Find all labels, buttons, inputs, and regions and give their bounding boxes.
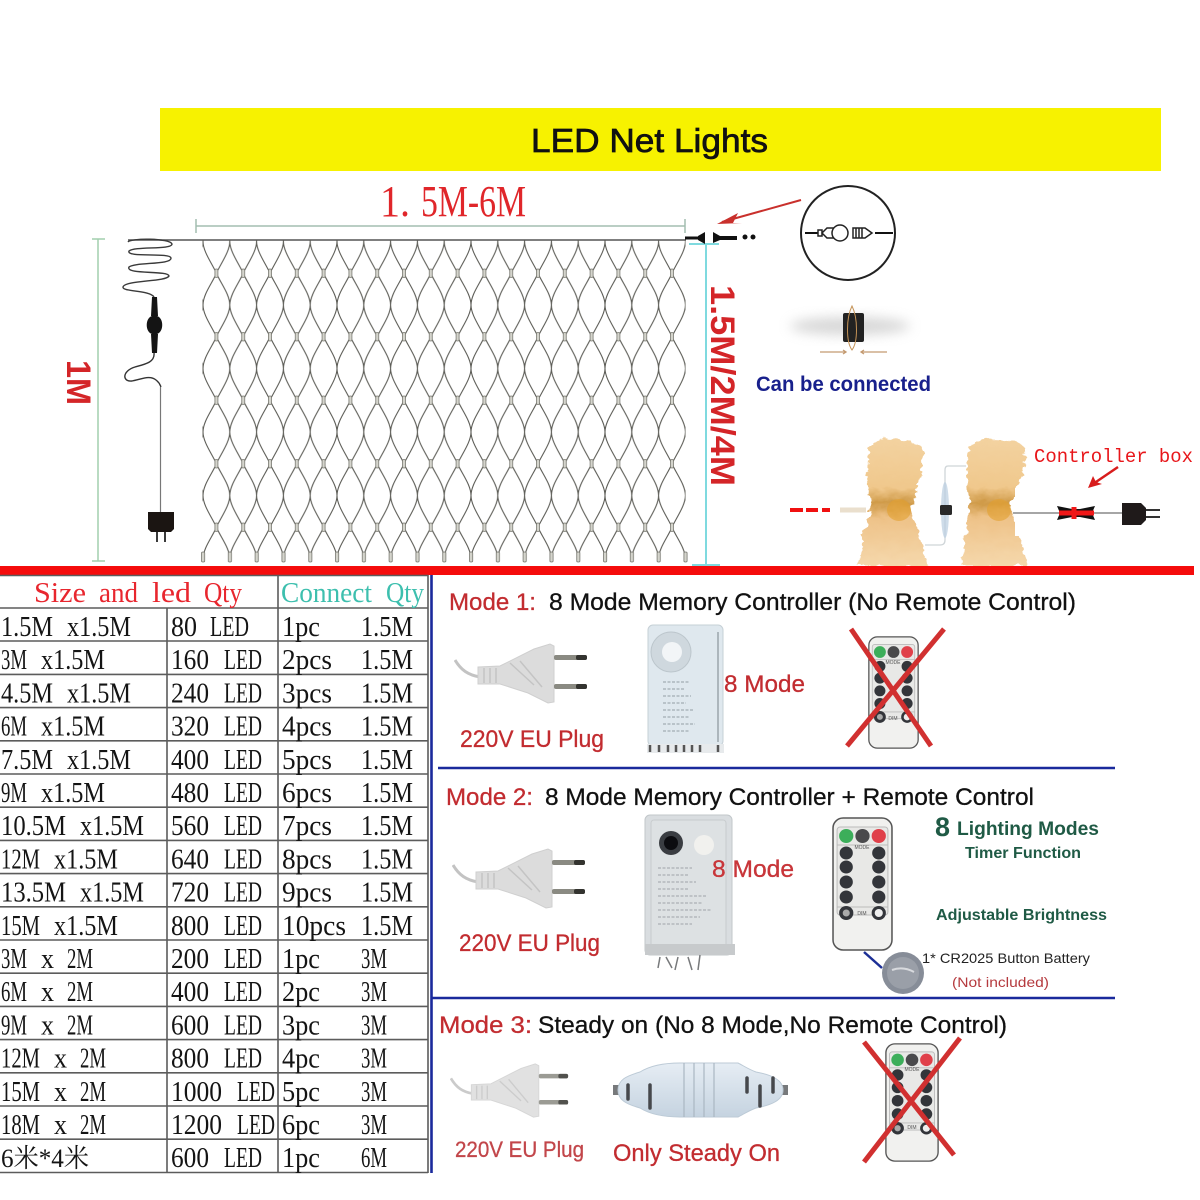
icon: remote control: MODE (854, 845, 870, 851)
row 6M x1.5M (1, 712, 413, 743)
icon: EU plug (451, 1064, 568, 1117)
row 3M x1.5M: 2pcs (282, 645, 332, 676)
row 6米*4米: 1pc (282, 1143, 320, 1174)
row 6M x 2M: 2pc (282, 977, 320, 1008)
row 7.5M x1.5M: x1.5M (67, 745, 131, 776)
row 3M x 2M: 200 (171, 944, 209, 975)
label: 8 mode: 8 Mode (724, 671, 805, 698)
icon: remote control: DIM (857, 911, 867, 917)
row 12M x1.5M: 1.5M (361, 844, 413, 875)
label: only steady on: Only Steady On (613, 1140, 780, 1167)
row 12M x 2M: 4pc (282, 1044, 320, 1075)
height label 1.5M/2M/4M: 1.5M/2M/4M (703, 285, 741, 486)
row 6M x1.5M: 1.5M (361, 712, 413, 743)
row 12M x1.5M: 12M (1, 844, 40, 875)
icon: controller with receiver (645, 815, 735, 970)
table header: connect qty: Connect (281, 578, 372, 609)
connector detail circle (801, 186, 895, 280)
row 15M x1.5M: 15M (1, 911, 40, 942)
row 9M x 2M: x (41, 1010, 54, 1041)
height dimension line cyan (689, 244, 720, 566)
mode 3 heading: Steady on (No 8 Mode,No Remote Control) (538, 1012, 1007, 1039)
row 10.5M x1.5M: x1.5M (80, 811, 144, 842)
mode 1 heading: 8 Mode Memory Controller (No Remote Control) (549, 589, 1076, 616)
row 18M x 2M: 18M (1, 1110, 40, 1141)
row 18M x 2M: 3M (361, 1110, 387, 1141)
row 15M x 2M: 15M (1, 1077, 40, 1108)
table header: connect qty (281, 578, 424, 609)
row 9M x 2M (1, 1010, 387, 1041)
row 7.5M x1.5M: 1.5M (361, 745, 413, 776)
row 13.5M x1.5M: 9pcs (282, 878, 332, 909)
row 6M x 2M: 6M (1, 977, 27, 1008)
row 9M x1.5M: 6pcs (282, 778, 332, 809)
row 3M x1.5M: x1.5M (41, 645, 105, 676)
row 6米*4米: 6M (361, 1143, 387, 1174)
width dimension label: 1. (380, 177, 410, 226)
row 4.5M x1.5M: 3pcs (282, 678, 332, 709)
row 4.5M x1.5M: x1.5M (67, 678, 131, 709)
icon: crossed out remote: DIM (888, 716, 898, 722)
plug label: 220V EU Plug (459, 930, 600, 957)
row 15M x 2M: 3M (361, 1077, 387, 1108)
row 9M x1.5M: 1.5M (361, 778, 413, 809)
red arrow to connector detail (717, 200, 801, 224)
row 12M x 2M: x (54, 1044, 67, 1075)
row 9M x1.5M: LED (224, 778, 262, 809)
row 9M x 2M: LED (224, 1010, 262, 1041)
row 1.5M x1.5M: 1pc (282, 612, 320, 643)
row 6米*4米: 600 (171, 1143, 209, 1174)
red divider (0, 566, 1194, 575)
row 12M x1.5M (1, 844, 413, 875)
row 6M x 2M: LED (224, 977, 262, 1008)
row 13.5M x1.5M: LED (224, 878, 262, 909)
width dimension label: 5M-6M (421, 177, 526, 226)
row 3M x1.5M (1, 645, 413, 676)
plug label: 220V EU Plug (455, 1137, 584, 1162)
row 4.5M x1.5M (1, 678, 413, 709)
row 6M x 2M: 3M (361, 977, 387, 1008)
row 15M x1.5M: 10pcs (282, 911, 346, 942)
row 15M x1.5M (1, 911, 413, 942)
row 9M x 2M: 600 (171, 1010, 209, 1041)
row 9M x 2M: 3M (361, 1010, 387, 1041)
height label 1M: 1M (59, 360, 97, 405)
row 1.5M x1.5M: 1.5M (1, 612, 53, 643)
row 9M x1.5M: 480 (171, 778, 209, 809)
width dimension line (196, 219, 685, 233)
row 4.5M x1.5M: 1.5M (361, 678, 413, 709)
row 6M x 2M: x (41, 977, 54, 1008)
row 6M x1.5M: x1.5M (41, 712, 105, 743)
icon: EU plug (455, 644, 587, 703)
connected plug icon (790, 306, 910, 354)
row 6米*4米 (1, 1143, 387, 1174)
row 10.5M x1.5M: LED (224, 811, 262, 842)
row 15M x 2M: 2M (80, 1077, 106, 1108)
feature list: Adjustable Brightness (936, 907, 1107, 924)
row 13.5M x1.5M: 13.5M (1, 878, 66, 909)
row 7.5M x1.5M (1, 745, 413, 776)
net light grid (128, 240, 688, 563)
table header: size and led qty (34, 578, 242, 609)
icon: 8 mode controller (647, 625, 724, 753)
panel: mode 2 (446, 784, 1107, 994)
panel: mode 3 (439, 1012, 1007, 1167)
mode 3 heading: Mode 3: (439, 1012, 532, 1039)
row 10.5M x1.5M (1, 811, 413, 842)
row 3M x 2M: x (41, 944, 54, 975)
row 10.5M x1.5M: 1.5M (361, 811, 413, 842)
row 4.5M x1.5M: 240 (171, 678, 209, 709)
feature list: Timer Function (965, 845, 1081, 862)
label: 8 mode: 8 Mode (712, 856, 794, 883)
row 6M x1.5M: 6M (1, 712, 27, 743)
panel: mode 1 (449, 589, 1076, 753)
row 18M x 2M: x (54, 1110, 67, 1141)
controller box label: Controller box (1034, 446, 1193, 468)
feature list (935, 812, 1107, 924)
mode 2 heading: Mode 2: (446, 784, 533, 811)
row 9M x1.5M: x1.5M (41, 778, 105, 809)
power lead with coil and plug (123, 239, 174, 542)
row 18M x 2M: 6pc (282, 1110, 320, 1141)
row 7.5M x1.5M: 5pcs (282, 745, 332, 776)
row 3M x 2M: 1pc (282, 944, 320, 975)
row 3M x 2M: 2M (67, 944, 93, 975)
row 10.5M x1.5M: 7pcs (282, 811, 332, 842)
row 12M x 2M: 800 (171, 1044, 209, 1075)
row 12M x1.5M: LED (224, 844, 262, 875)
table header: size and led qty: and (99, 578, 138, 609)
row 12M x1.5M: 8pcs (282, 844, 332, 875)
row 15M x 2M (1, 1077, 387, 1108)
row 1.5M x1.5M: LED (210, 612, 249, 643)
row 12M x 2M (1, 1044, 387, 1075)
size and quantity table (0, 575, 428, 1174)
row 4.5M x1.5M: LED (224, 678, 262, 709)
row 15M x1.5M: LED (224, 911, 262, 942)
row 1.5M x1.5M: x1.5M (67, 612, 131, 643)
icon: crossed out remote (847, 629, 944, 748)
row 7.5M x1.5M: 7.5M (1, 745, 53, 776)
feature list: 8 (935, 812, 950, 842)
plug label: 220V EU Plug (460, 726, 604, 753)
row 6M x1.5M: LED (224, 712, 262, 743)
row 9M x1.5M: 9M (1, 778, 27, 809)
row 15M x1.5M: 800 (171, 911, 209, 942)
row 3M x1.5M: 160 (171, 645, 209, 676)
icon: crossed out remote: MODE (886, 660, 901, 666)
row 6M x 2M: 2M (67, 977, 93, 1008)
icon: crossed out remote (864, 1038, 960, 1162)
title banner: LED Net Lights (531, 122, 768, 159)
row 9M x 2M: 9M (1, 1010, 27, 1041)
battery text (922, 950, 1090, 990)
table header: size and led qty: Qty (204, 578, 242, 609)
end connector (685, 232, 756, 244)
row 15M x1.5M: x1.5M (54, 911, 118, 942)
row 6M x1.5M: 4pcs (282, 712, 332, 743)
row 3M x 2M: 3M (1, 944, 27, 975)
row 18M x 2M: 2M (80, 1110, 106, 1141)
row 4.5M x1.5M: 4.5M (1, 678, 53, 709)
row 3M x1.5M: 1.5M (361, 645, 413, 676)
title banner (160, 108, 1161, 171)
row 13.5M x1.5M: 1.5M (361, 878, 413, 909)
row 9M x 2M: 2M (67, 1010, 93, 1041)
row 10.5M x1.5M: 10.5M (1, 811, 66, 842)
row 12M x 2M: LED (224, 1044, 262, 1075)
row 6米*4米: 6米*4米 (1, 1144, 89, 1173)
controller box label (1034, 446, 1193, 488)
row 12M x 2M: 2M (80, 1044, 106, 1075)
icon: steady-on adapter (613, 1063, 788, 1117)
row 13.5M x1.5M: x1.5M (80, 878, 144, 909)
row 7.5M x1.5M: 400 (171, 745, 209, 776)
battery text: 1* CR2025 Button Battery (922, 950, 1090, 966)
row 3M x1.5M: LED (224, 645, 262, 676)
row 12M x 2M: 12M (1, 1044, 40, 1075)
row 6M x1.5M: 320 (171, 712, 209, 743)
row 1.5M x1.5M (1, 612, 413, 643)
row 15M x 2M: x (54, 1077, 67, 1108)
mode 1 heading: Mode 1: (449, 589, 536, 616)
row 3M x 2M: 3M (361, 944, 387, 975)
row 6M x 2M (1, 977, 387, 1008)
row 15M x1.5M: 1.5M (361, 911, 413, 942)
row 6米*4米: LED (224, 1143, 262, 1174)
feature list: Lighting Modes (957, 819, 1099, 840)
table header: connect qty: Qty (386, 578, 424, 609)
table header: size and led qty: led (152, 578, 191, 609)
caption: can be connected: Can be connected (756, 373, 931, 396)
row 12M x1.5M: x1.5M (54, 844, 118, 875)
icon: remote control (833, 818, 892, 950)
width dimension label (380, 177, 526, 226)
icon: crossed out remote: DIM (907, 1125, 917, 1131)
row 12M x1.5M: 640 (171, 844, 209, 875)
battery text: (Not included) (952, 974, 1049, 990)
row 18M x 2M: 1200 (171, 1110, 222, 1141)
row 6M x 2M: 400 (171, 977, 209, 1008)
icon: crossed out remote: MODE (904, 1067, 920, 1073)
row 12M x 2M: 3M (361, 1044, 387, 1075)
icon: EU plug (453, 849, 585, 908)
row 15M x 2M: LED (237, 1077, 275, 1108)
row 15M x 2M: 1000 (171, 1077, 222, 1108)
row 15M x 2M: 5pc (282, 1077, 320, 1108)
row 1.5M x1.5M: 80 (171, 612, 197, 643)
table header: size and led qty: Size (34, 578, 86, 609)
row 9M x 2M: 3pc (282, 1010, 320, 1041)
row 3M x1.5M: 3M (1, 645, 27, 676)
height dimension line 1M (92, 239, 105, 561)
mode 2 heading: 8 Mode Memory Controller + Remote Control (545, 784, 1034, 811)
row 10.5M x1.5M: 560 (171, 811, 209, 842)
row 18M x 2M (1, 1110, 387, 1141)
row 18M x 2M: LED (237, 1110, 275, 1141)
row 7.5M x1.5M: LED (224, 745, 262, 776)
row 13.5M x1.5M (1, 878, 413, 909)
row 3M x 2M: LED (224, 944, 262, 975)
row 13.5M x1.5M: 720 (171, 878, 209, 909)
icon: button battery (864, 952, 924, 994)
row 9M x1.5M (1, 778, 413, 809)
controller box wiring illustration (790, 440, 1160, 566)
row 1.5M x1.5M: 1.5M (361, 612, 413, 643)
row 3M x 2M (1, 944, 387, 975)
